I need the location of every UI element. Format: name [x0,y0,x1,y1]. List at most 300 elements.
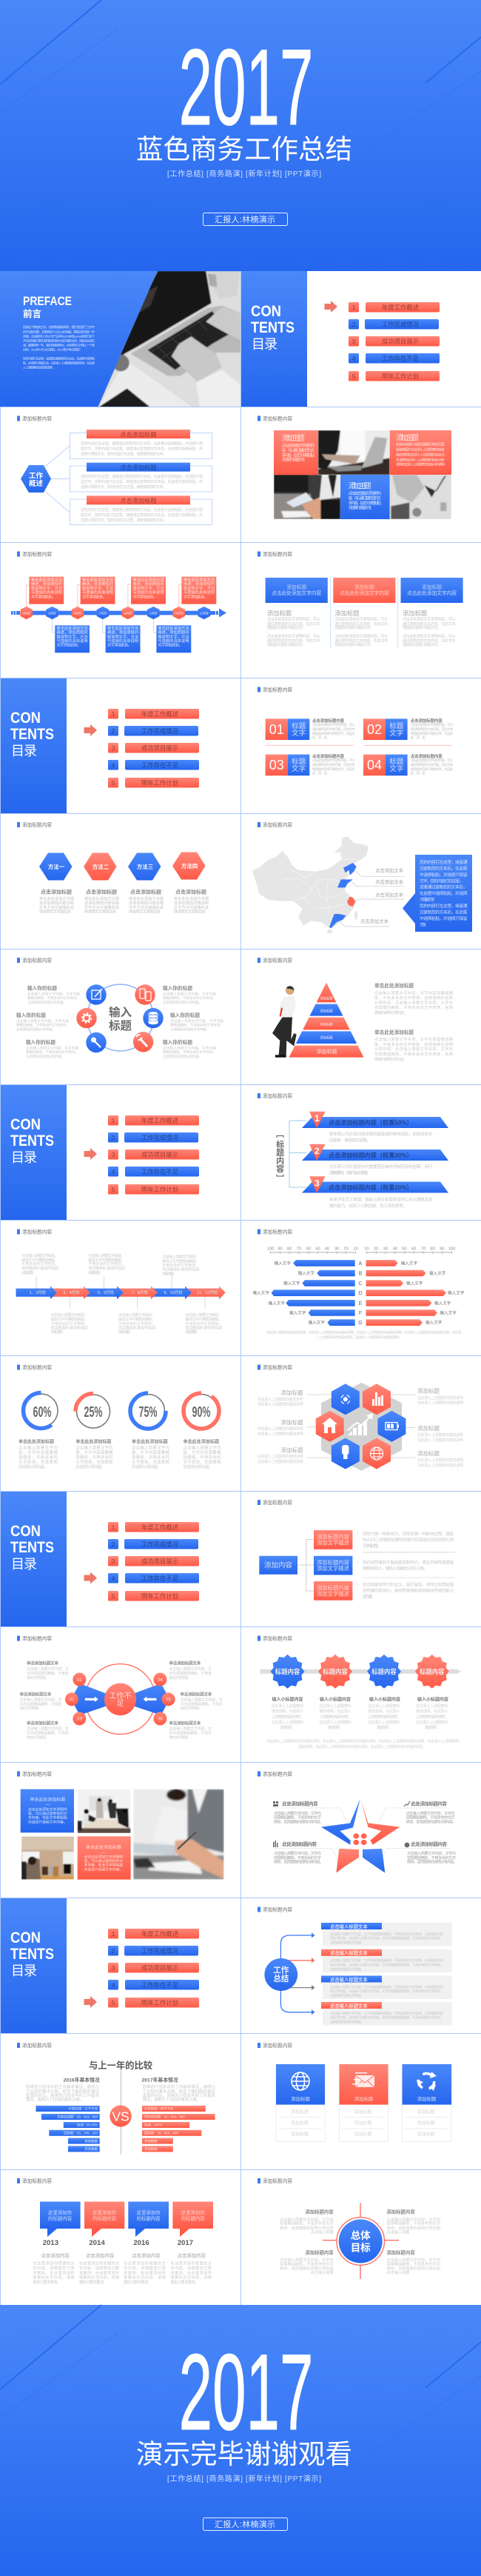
method titles: 点击添加标题 [41,889,72,895]
donut captions: 容，文字内容需要概 [184,1449,221,1455]
slide header [258,1092,292,1099]
bow labels: 点击输入简要文字内容，文 [27,1666,69,1672]
item 04: 处添加 [411,771,426,776]
weight item 2 [302,1144,448,1176]
item 02: 处添加 [411,735,426,741]
contents list [349,302,440,381]
slide header: 添加标题内容 [22,957,52,964]
goal labels: 点击输入简要 [311,2229,334,2235]
milestone note boxes: 文字添加此处。 [82,594,107,599]
summary item 4: 点击输入标题文本 [330,2002,368,2009]
year descriptions: 需要的文字内容，请根 [124,2275,166,2280]
column text: 点击此处添加文字说明内容，可以 [403,617,456,622]
donut 90% [184,1393,219,1429]
slide header: 添加标题内容 [263,1770,292,1778]
contents list: 年度工作概述 [141,1524,178,1531]
comparison text: 2017年基本情况 [142,2077,178,2083]
contents list [108,709,199,788]
photo mosaic: 说明在此录入上述图表的综合分析说明 [396,461,445,467]
badge captions: 输入小标题内容 [272,1696,303,1702]
summary item 4 [321,2002,452,2025]
photo mosaic: 本内容，在此文本框粘贴 [282,452,315,458]
card 2: 添加标题 [354,2109,372,2115]
honeycomb labels: 在此录入上述图表的描述说明 [417,1438,463,1443]
branch descriptions: 艺术或过程。 [363,1543,381,1549]
panel: honeycomb slide [258,1364,463,1471]
weight item 3: 展的能力。如员工人数控制、员工流失率等。 [329,1203,407,1209]
callout bubbles: 这里添加你 [92,2209,117,2216]
weight item 2: 为实现公司价值增长的重要营运操作控制活动的因果。如行 [329,1164,433,1169]
summary item 2: 言简意赅的说明分项内容。 [330,1967,364,1972]
contents list: 5 [352,373,356,380]
callout box [403,855,472,932]
illustration: businessman and pyramid: 添加标题 [320,1035,333,1041]
year descriptions: 求更改。在这里添加你 [79,2269,119,2275]
slide header [258,2042,292,2049]
timeline notes: 解说文字尽量概括精炼， [51,1317,88,1322]
honeycomb labels: 在此录入上述图表的描述说明 [258,1427,303,1432]
bow labels: 点击输入简要文字内容，文 [169,1726,212,1732]
chart axes: 20 [344,1247,349,1252]
contents heading [10,1521,54,1572]
photo mosaic: 析说明在此录入上述图表的综合分析 [396,457,445,462]
column headers: 添加标题 [422,584,442,590]
preface body: 回顾这个季度的工作，在取得成绩的同时，我们也找到了工作中 [23,324,95,329]
icon: key [86,1032,107,1052]
numbered nodes: 02 [70,1698,75,1703]
branch descriptions: 领导力是一种影响力，领导即是一种影响过程，是影 [363,1531,454,1537]
donut captions: 单击此处添加标题 [184,1438,219,1444]
donut 60% [24,1392,59,1428]
contents list: 2 [112,1134,115,1141]
slide header: 添加标题内容 [22,1228,52,1235]
center node: 足 [117,1699,124,1708]
donut captions: 文字修饰，言简意赅 [132,1459,170,1465]
badge captions: 上述图表的描述说明， [416,1714,448,1720]
cover title: 蓝色商务工作总结 [136,134,352,164]
bow labels: 单击添加标题文本 [169,1661,201,1666]
summary arrows [280,1933,315,2015]
item 04: 框粘贴并选择只保留文字。点击此 [411,767,454,772]
item box 3: 留文字。您的内容打在这里，或者通过复制您的文本后，在此框中选择粘贴，并 [81,513,203,518]
bar labels: 输入文字 [406,1280,423,1286]
contents heading: CON [10,1928,41,1946]
contents list: 成功项目展示 [141,744,178,752]
bow labels: 字内容需概括精炼，不用多 [169,1731,212,1736]
star captions: 点击输入简要文字内容，文字内 [406,1810,454,1816]
ring labels: 言简意赅的说明分项内容。 [170,1027,209,1032]
branch descriptions: 够影响别人，使别人追随自己的人物。 [363,1566,428,1572]
donut captions: 点击输入简要文字内 [184,1445,221,1451]
goal labels: 容需概括精炼，不用多余的文字 [280,2220,334,2226]
chart axes: 80 [287,1247,292,1252]
panel: input title ring slide [16,957,223,1059]
contents list: 成功项目展示 [382,338,419,345]
panel: work summary slide [258,1906,452,2025]
2016 bars: 完成：93.33% [77,2123,98,2128]
slide header [258,415,292,422]
slide header: 添加标题内容 [263,821,292,828]
summary circle: 总结 [273,1974,289,1983]
2017 bars: 其他数据 [144,2138,158,2143]
honeycomb labels: 添加标题 [281,1389,303,1396]
pyramid text: 单击此处添加标题 [374,1029,414,1035]
milestone note boxes: 阐述，添加简短问 [107,630,138,635]
column text: 框粘贴并选择只保留文字。 [403,625,441,630]
year descriptions: 字内容，请根据自己要 [170,2265,212,2271]
goal labels: 点击输入简要 [311,2269,334,2275]
milestone note boxes: 文字添加此处。 [158,643,182,648]
arrow marker [84,724,97,736]
star captions: 此处添加标题内容 [283,1801,318,1807]
photo mosaic: 右键点击图片选择设置图片格式可直 [396,442,445,447]
chart axes: 70 [421,1247,426,1252]
photo mosaic [274,430,451,519]
ring [87,984,154,1051]
slide header: 添加标题内容 [263,1635,292,1641]
chevron arrows: 1、2月份 [30,1289,47,1295]
method descriptions: 体说明文字添加此处 [174,910,206,914]
honeycomb labels: 添加标题 [417,1449,440,1457]
item 04: 标题 [389,758,404,767]
panel: pyramid slide [258,957,453,1062]
milestone note boxes: 题说明文字，方法 [31,586,62,591]
year labels: 2013 [43,2239,58,2247]
column text: 框粘贴并选择只保留文字。 [334,625,373,630]
column text: 通过复制您的文本内容，在此文本 [334,638,388,643]
column text: 添加标题 [267,610,292,617]
bar labels: 输入文字 [289,1309,306,1315]
map labels: 点击添加文本 [375,878,404,885]
hexagon: work overview: 工作 [29,471,43,480]
numbered nodes: 04 [158,1678,163,1683]
icon: gear [76,1008,97,1028]
goal labels: 点击输入简要文字内容，文字内 [280,2257,334,2263]
contents list: 成功项目展示 [141,1558,178,1565]
bar labels [253,1261,465,1326]
preface body: 入上述图表的综合描述说明。 [23,364,55,369]
year descriptions: 在这里添加你需要的文 [170,2260,212,2266]
year descriptions: 在这里添加你需要的文 [33,2260,75,2266]
slide header [258,1906,292,1912]
ring labels: 点击输入简要文字内容，文字内容 [163,1046,216,1050]
ring labels: 需概括精炼，不用多余的文字修饰， [163,995,216,1001]
bow labels: 字内容需概括精炼，不用多 [27,1671,69,1676]
timeline notes: 解说文字尽量概括精炼， [21,1258,58,1263]
badge captions: 描述说明，在此录入 [319,1708,352,1714]
year descriptions: 求更改。在这里添加你 [124,2269,166,2275]
photo mosaic: 并选择只保留文字。 [282,457,308,463]
star captions: 容需概括精炼，不用多余的文字 [407,1855,456,1861]
contents list: 1 [112,710,115,718]
badge captions: 描述说明。 [280,1724,295,1730]
month hexagons [20,607,210,619]
contents list: 1 [352,304,356,311]
card 1: 添加标题 [291,2132,309,2138]
star captions: 容需概括精炼，不用多余的文字 [274,1855,321,1861]
timeline notes: 不用多余的文字修饰， [21,1261,58,1267]
callout box: 过复制您的文本后，在此框 [420,909,468,915]
bar labels: 输入文字 [448,1290,465,1296]
bow labels: 余的文字修饰。 [169,1675,191,1681]
method descriptions: 述添加简短问题说明 [84,901,119,906]
honeycomb labels: 添加标题 [417,1424,440,1432]
pyramid text: 点击输入简要文字内容，文字内容需概括精 [374,1036,453,1042]
column text: 框粘贴并选择只保留文字。 [334,642,373,647]
comparison text: 直观的对比。简单的介绍本年的工作基本 [143,2092,215,2098]
slide header [17,1635,52,1641]
ring labels: 言简意赅的说明分项内容。 [163,1054,202,1059]
illustration: businessman and pyramid: 添加标题 [317,1048,337,1055]
gray base hexagon [321,1383,402,1471]
donut captions: 的说明分项内容。 [132,1464,161,1470]
panel: contents slide 1 [240,271,440,407]
pyramid text: 分项内容。点击输入简要文字内容，文字内 [374,1046,453,1052]
illustration: businessman and pyramid [272,983,363,1058]
contents list: 工作完成情况 [382,321,420,328]
branch descriptions: 结合前面领导力的定义，我们发现，领导力实质就是 [363,1582,454,1588]
slide header [17,821,52,828]
contents list: 3 [352,338,356,345]
preface body: 不光成为客户想开发的和有时间XX成方便的业务，用此也会成百 [23,338,95,342]
timeline notes: 简洁精准的 解说所强调 [185,1326,222,1330]
bar labels: 输入文字 [269,1300,285,1306]
bar labels: 输入文字 [426,1320,443,1326]
panel: map slide [252,821,472,933]
year descriptions: 求更改。在这里添加你 [33,2269,75,2275]
chart axes: 100 [267,1247,274,1252]
timeline notes: 简洁精准的 解说所强调 [51,1326,88,1330]
summary item 3: 明分项内容。点击输入简要文字内容，文字内容需概括精炼，不用多余的文字修饰， [330,1989,443,1994]
honeycomb labels: 在此录入上述图表的描述说明 [417,1458,463,1463]
2017 bars: 计划完成：四千万元 [144,2106,174,2112]
callout box: 过复制您的文本后，在此框 [420,865,468,871]
contents list [108,1115,199,1194]
star captions [273,1801,457,1865]
honeycomb labels: 在此录入上述图表的描述说明 [258,1454,303,1459]
badge captions: 在此录入上述图表的 [368,1719,400,1725]
item 01: 标题 [292,721,306,730]
item 02: 框粘贴并选择只保留文字。点击此 [411,731,454,736]
card 1 [276,2064,325,2142]
year descriptions: 据自己要求更改。 [33,2279,61,2285]
ring center title: 输入 [109,1005,132,1019]
bar labels: 输入文字 [440,1309,457,1315]
donut 75%: 75% [139,1404,158,1421]
donut captions: 点击输入简要文字内 [132,1445,169,1451]
starburst badges: 标题内容 [323,1668,348,1675]
numbered nodes [65,1672,175,1725]
method hexagons: 方法一 [48,864,65,870]
hexagon: work overview [21,465,51,493]
badge captions: 在此录入上述图表的 [272,1719,303,1725]
branch descriptions: 或力量。 [363,1593,375,1599]
timeline notes: 不用多余的文字修饰， [162,1263,199,1268]
photo mosaic: 本内容，在此文本框粘贴 [28,1815,67,1821]
item 01: 处添加 [312,735,327,741]
chart note [266,1330,462,1340]
goal labels: 容需概括精炼，不用多余的文字 [386,2220,440,2226]
slide header: 添加标题内容 [22,821,52,828]
slide header: 添加标题内容 [22,2042,52,2049]
contents list: 4 [112,1575,115,1582]
contents list: 工作存在不足 [141,761,178,769]
contents heading: CON [10,708,41,727]
timeline notes: 解说文字尽量概括精炼， [185,1317,222,1322]
contents list: 明年工作计划 [141,779,178,787]
year descriptions: 点击添加内容 [132,2252,161,2259]
chart axes: 40 [393,1247,397,1252]
star captions: 点击输入简要文字内容，文字内 [274,1850,321,1856]
VS badge: VS [112,2109,130,2124]
item 04 [363,753,454,776]
method descriptions: 体说明文字添加此处 [39,910,71,914]
panel: contents slide 5 [0,1898,199,2033]
contents heading: TENTS [10,1944,54,1963]
callout box: 文字。您的内容打在这里， [420,878,463,884]
item 02: 点击此处添加文字说明内容，可以 [411,722,454,727]
chevron arrows [16,1286,226,1299]
starburst badges: 标题内容 [420,1668,445,1675]
photo mosaic: 点击此处添加文字说明内 [28,1806,67,1812]
photo mosaic: 单击此处添加标题 [30,1797,65,1803]
chart axes: 100 [448,1247,455,1252]
goal circle: 总体 [351,2229,371,2241]
chart axes: 60 [411,1247,416,1252]
star captions: 点击输入简要文字内容，文字内 [407,1850,456,1856]
bar labels: G [358,1321,363,1326]
panel: bow diagram slide [17,1635,223,1740]
bow labels: 单击添加标题文本 [27,1720,58,1726]
closing subtitle: [工作总结] [商务路演] [新年计划] [PPT演示] [167,2474,321,2483]
goal labels: 点击输入简要文字内容，文字内 [386,2216,440,2222]
ring labels: 需概括精炼，不用多余的文字修饰， [163,1050,216,1055]
item box 2: 您的内容打在这里，或者通过复制您的文本后，在此框中选择粘贴，并选择只保 [81,474,203,479]
starburst badges [271,1655,449,1689]
method descriptions: 单击此处添加方法阐 [129,896,164,901]
milestone note boxes: 单击此处添加方法 [133,578,164,582]
root box: 添加内容 [264,1561,292,1570]
arrow marker [84,1996,97,2008]
donut captions: 单击此处添加标题 [75,1438,111,1444]
weight item 2: 政管理费用、大客户投诉次数等。 [329,1170,371,1176]
slide header: 添加标题内容 [263,1364,292,1370]
method descriptions: 文字方法与措施的具 [129,905,164,910]
item 04: 点击添加标题内容 [411,753,443,759]
connector lines [46,446,70,513]
timeline notes: 点击输入简要文字解说， [162,1255,199,1259]
goal labels: 点击输入简要 [386,2269,410,2275]
column text: 点击此处添加文字说明内容，可以 [403,634,456,639]
bar labels: 输入文字 [434,1300,451,1306]
contents list: 成功项目展示 [141,1151,178,1158]
contents list: 1 [112,1117,115,1124]
year descriptions: 需要的文字内容，请根 [33,2275,75,2280]
pyramid text: 炼，不用多余的文字修饰，言简意赅的说明 [374,995,453,1001]
contents heading [10,1928,54,1978]
bow wings [71,1684,169,1715]
method hexagons: 方法三 [137,864,153,870]
numbered nodes: 05 [166,1698,172,1703]
bow labels: 点击输入简要文字内容，文 [180,1698,223,1703]
card 1: 添加标题 [291,2109,309,2115]
vertical title [276,1136,284,1176]
contents list: 4 [112,761,115,769]
badge captions: 描述说明。 [328,1724,343,1730]
slide header [258,1499,292,1506]
column text: 添加标题 [403,610,427,617]
donut captions: 容，文字内容需要概 [75,1449,113,1455]
panel: tree diagram slide [258,1499,455,1601]
bracket lines [289,1121,306,1187]
bow labels: 余的文字修饰。 [180,1706,202,1711]
card 3 [403,2064,451,2142]
slide header [17,551,52,557]
donut captions: 文字修饰，言简意赅 [18,1459,58,1465]
panel: weighted items slide [258,1092,448,1209]
chart axes: 90 [440,1247,445,1252]
branch boxes: 添加标题内容 [317,1533,349,1541]
slide header [17,415,52,422]
year descriptions: 在这里添加你需要的文 [124,2260,166,2266]
panel: donut charts slide [17,1364,221,1470]
map labels: 点击添加文本 [375,867,404,874]
contents list: 2 [112,1947,115,1955]
center divider [120,2070,121,2154]
closing presenter box: 汇报人:林楠演示 [215,2519,275,2529]
milestone note boxes: 单击此处添加方法 [107,626,138,631]
column text: 点击此处添加文字说明内容，可以 [334,617,388,622]
panel: arrow timeline slide [16,1228,226,1335]
milestone note boxes: 与措施的具体说明 [31,590,62,595]
icon: globe [292,2072,309,2090]
item 03: 处添加 [312,771,327,776]
slide header [17,957,52,964]
panel: yearly callouts slide [17,2178,213,2285]
column text: 通过复制您的文本内容，在此文本 [403,621,456,627]
panel: badge steps slide [258,1635,461,1749]
ring labels: 输入你的标题 [163,1038,192,1046]
item box 3: 选择只保留文字。您的内容打在这里，或者复制您的文本。 [81,518,166,523]
milestone note boxes: 题说明文字，方法 [107,634,138,639]
photo mosaic: 容，可以通过复制你的文 [28,1811,67,1816]
bow labels: 字内容需概括精炼，不用多 [19,1701,62,1706]
card 3: 添加标题 [417,2109,435,2115]
2016 bars: 回款数：20，745，100 [64,2130,98,2136]
contents list: 工作完成情况 [141,1134,179,1141]
branch descriptions: 现代领导者的才能就是其影响力，真正的领导者是能 [363,1560,454,1566]
star captions: 点击输入简要文字内容，文字内 [274,1810,321,1816]
preface photo [98,271,240,407]
contents list: 工作存在不足 [382,355,419,362]
item box 3 [70,495,212,524]
year descriptions: 在这里添加你需要的文 [79,2260,120,2266]
milestone note boxes [29,577,216,653]
card 2 [339,2064,388,2142]
year descriptions [33,2252,212,2285]
white arrows [85,1696,156,1702]
map labels: 点击添加文本 [360,918,389,924]
milestone note boxes: 与措施的具体说明 [158,638,189,644]
center node: 工作不 [110,1692,132,1701]
goal labels: 修饰，言简意赅的说明分项内容。 [386,2265,444,2271]
bow labels: 字内容需概括精炼，不用多 [180,1701,223,1706]
contents list: 3 [112,1151,115,1158]
bar labels: 输入文字 [275,1261,291,1267]
goal labels: 添加标题内容 [386,2249,415,2255]
preface body: 突破，在高新网上的公司产品率先(XX系统)xxxxx和我们这个 [23,333,95,338]
year 2017: 2017 [179,27,313,148]
